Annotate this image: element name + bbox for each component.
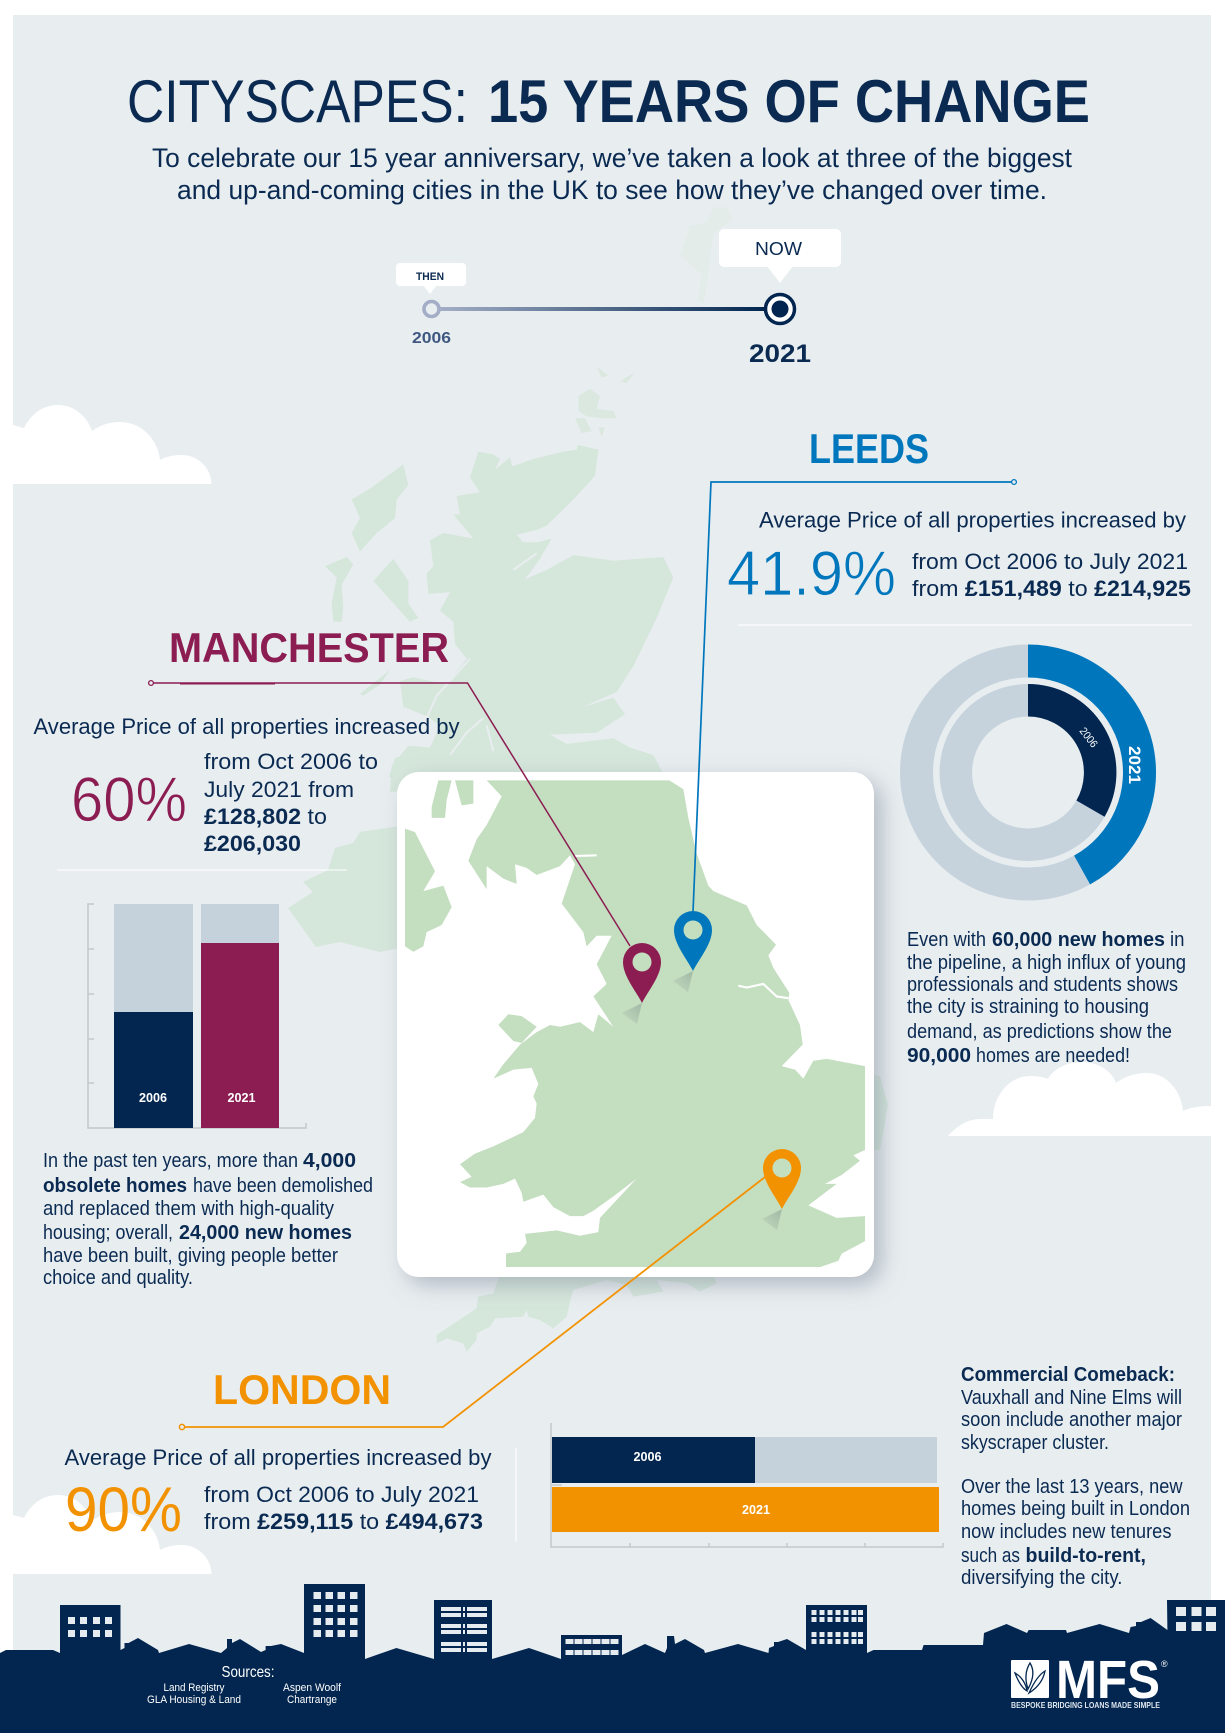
text: Leeds body: in [1170,929,1184,951]
text: Manchester price detail [204,749,378,856]
text: sources: GLA Housing & Land [147,1694,241,1706]
text: London body: build-to-rent, [1026,1545,1146,1567]
text: Leeds body: 60,000 new homes [992,929,1165,951]
text: Manchester body: 24,000 new homes [179,1222,352,1244]
text: Manchester body [43,1150,373,1289]
callout: now [719,229,841,283]
bar: 2021 [552,1487,939,1532]
stat: 90%: 90% [65,1475,182,1545]
text: Leeds body: professionals and students shows [907,974,1178,996]
text: Manchester body: obsolete homes [43,1175,187,1197]
text: Manchester price intro: Average Price of all properties increased by [34,714,460,739]
text: sources: Aspen Woolf [283,1682,342,1694]
intro text [152,143,1072,205]
text: London body: soon include another major [961,1409,1182,1431]
text: London body: Over the last 13 years, new [961,1476,1183,1498]
chart: Leeds donut [916,661,1144,884]
map: faded UK background [288,207,888,1352]
text: sources: Land Registry [164,1682,225,1694]
pin: Leeds [673,911,712,992]
text: Leeds body: 90,000 [907,1045,971,1067]
label: 2021: 2021 [1125,746,1144,784]
marker: 2006 [424,302,439,316]
text: Manchester body: In the past ten years, more than [43,1150,298,1172]
text: Manchester body: choice and quality. [43,1267,193,1289]
marker: 2021 [766,294,794,324]
bar: 2021 [201,904,279,1128]
text: Manchester body: have been built, giving people better [43,1245,338,1267]
text: Leeds price detail: from £151,489 to £214,925 [912,576,1191,601]
text: London body [961,1364,1190,1589]
text: London body: diversifying the city. [961,1567,1122,1589]
chart: Manchester stacked bars [88,904,306,1128]
label: 2021: 2021 [749,340,811,368]
label: 2006: 2006 [1077,725,1100,750]
icon: leaf mark [1011,1660,1049,1698]
text: Leeds body [907,929,1186,1067]
bar: 2021: 2021 [742,1502,770,1517]
timeline then to now [396,229,841,368]
text: London price detail [204,1482,483,1534]
text: Leeds body: the city is straining to housing [907,996,1149,1018]
text: Manchester price detail: £128,802 to [204,804,327,829]
text: Manchester body: have been demolished [193,1175,373,1197]
callout: then [396,263,466,294]
arc: 2006 [1028,700,1100,809]
heading: London: LONDON [213,1366,391,1413]
text: Manchester body: 4,000 [303,1150,356,1172]
text: London price detail: from Oct 2006 to July 2021 [204,1482,479,1507]
logo: MFS: ® [1161,1659,1168,1669]
connector: London [179,1177,765,1430]
bar: 2006: 2006 [634,1449,662,1464]
text: London price detail: from £259,115 to £494,673 [204,1509,483,1534]
text: London price intro: Average Price of all properties increased by [64,1445,492,1470]
text: Leeds price intro: Average Price of all properties increased by [759,508,1187,532]
bar: 2006 [114,904,193,1128]
text: London body: homes being built in London [961,1498,1190,1520]
arc: 2021 [1028,661,1140,870]
stat: 60%: 60% [71,765,187,835]
chart: London horizontal bars [551,1423,943,1547]
panel: map card [397,772,874,1277]
bar: 2006 [552,1437,937,1483]
text: Manchester price detail: from Oct 2006 to [204,749,378,774]
title [127,68,1090,135]
stat: 41.9%: 41.9% [727,539,896,609]
map: England and Wales detail [405,780,865,1267]
text: Manchester body: and replaced them with high-quality [43,1198,334,1220]
text: sources: Chartrange [287,1694,337,1706]
text: Leeds price detail [912,549,1191,601]
cloud: right [948,1062,1212,1136]
text: Manchester price detail: £206,030 [204,831,301,856]
cloud: bottom left [0,1495,212,1574]
logo: MFS: BESPOKE BRIDGING LOANS MADE SIMPLE [1011,1700,1160,1710]
heading: Manchester: MANCHESTER [169,624,449,671]
title: 15 YEARS OF CHANGE [488,68,1090,135]
cloud: top left [0,405,212,484]
text: sources [147,1664,342,1706]
text: London body: skyscraper cluster. [961,1432,1109,1454]
logo: MFS: MFS [1056,1650,1160,1710]
intro text: and up-and-coming cities in the UK to see how they’ve changed over time. [177,175,1047,205]
connector: Leeds [693,480,1016,912]
timeline line [438,307,768,311]
text: Leeds body: homes are needed! [976,1045,1130,1067]
text: Manchester body: housing; overall, [43,1222,173,1244]
callout: then: THEN [416,271,444,283]
text: London body: such as [961,1545,1020,1567]
skyline footer [0,1584,1225,1733]
connector: Manchester [149,681,630,946]
callout: now: NOW [755,239,802,259]
building windows [68,1592,1216,1655]
text: Manchester price detail: July 2021 from [204,777,354,802]
bar: 2021: 2021 [228,1090,256,1105]
text: Leeds price detail: from Oct 2006 to July 2021 [912,549,1188,574]
text: London body: Vauxhall and Nine Elms will [961,1387,1182,1409]
bar: 2006: 2006 [139,1090,167,1105]
text: sources: Sources: [222,1664,274,1681]
text: Leeds body: the pipeline, a high influx of young [907,952,1186,974]
text: London body: now includes new tenures [961,1521,1172,1543]
heading: Leeds: LEEDS [809,425,929,472]
pin: London [762,1149,801,1230]
text: Leeds body: demand, as predictions show the [907,1021,1172,1043]
text: Leeds body: Even with [907,929,986,951]
pin: Manchester [622,943,661,1024]
title: CITYSCAPES: [127,68,468,135]
intro text: To celebrate our 15 year anniversary, we’ve taken a look at three of the biggest [152,143,1072,173]
label: 2006: 2006 [412,330,451,347]
text: London body: Commercial Comeback: [961,1364,1175,1386]
